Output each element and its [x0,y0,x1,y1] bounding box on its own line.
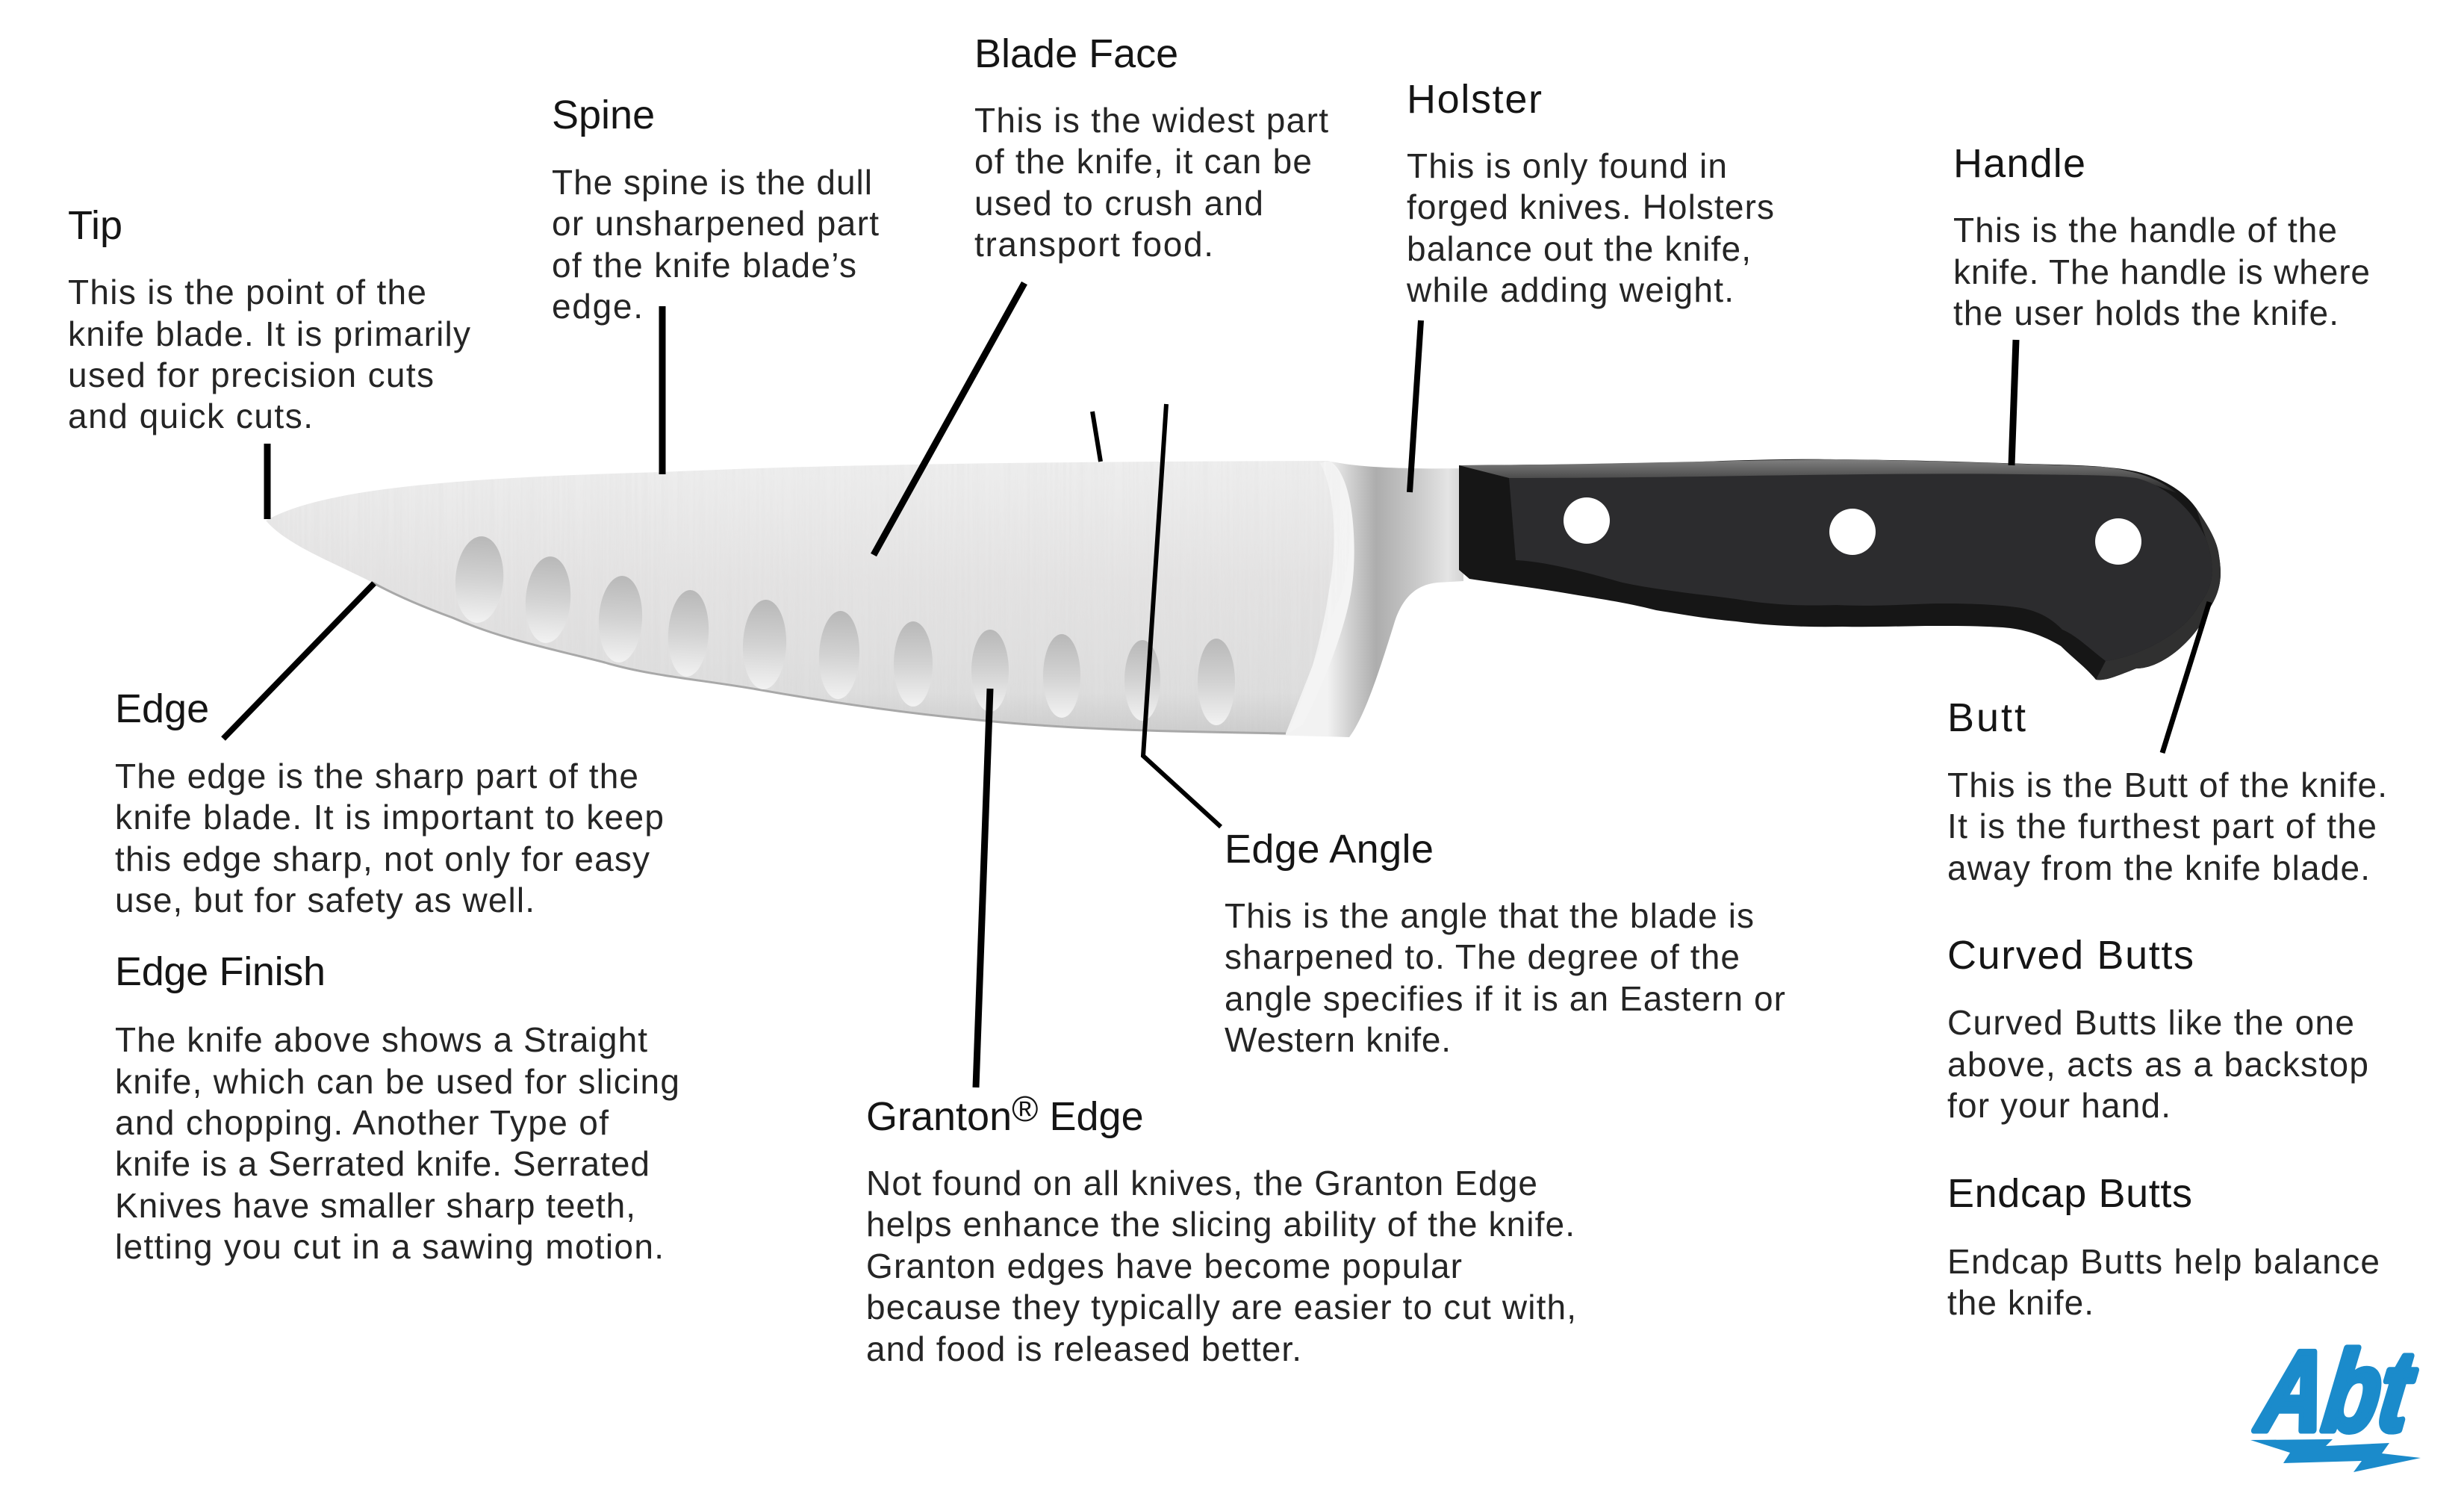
text block: edge finish: The knife above shows a Straight [115,1020,647,1059]
text block: edge: this edge sharp, not only for easy [115,839,650,878]
text block: endcap butts: Endcap Butts help balance [1947,1242,2380,1281]
text block: granton edge: Granton edges have become popular [866,1247,1462,1285]
text block: butt: It is the furthest part of the [1947,807,2377,845]
text block: holster: Holster [1407,77,1542,122]
text block: granton edge: helps enhance the slicing ability of the knife. [866,1205,1575,1244]
text block: edge: knife blade. It is important to keep [115,798,664,837]
text block: granton edge: and food is released better. [866,1329,1301,1368]
text block: granton edge: Granton [866,1094,1012,1139]
logo lightning bolt [2250,1439,2421,1472]
text block: holster: This is only found in [1407,146,1727,185]
text block: blade face [974,31,1328,264]
text block: edge angle: This is the angle that the blade is [1225,896,1754,935]
logo wordmark: Abt [2250,1329,2423,1455]
leader line: spine short mark [1092,412,1101,462]
text block: curved butts: above, acts as a backstop [1947,1045,2368,1084]
text block: holster [1406,77,1774,309]
blade [266,461,1350,733]
text block: edge finish: knife is a Serrated knife. Serrated [115,1144,650,1183]
leader line: blade face [874,283,1024,555]
text block: granton edge: Edge [1038,1094,1144,1139]
text block: edge finish: knife, which can be used for slicing [115,1062,679,1101]
text block: handle: knife. The handle is where [1953,252,2370,291]
text block: endcap butts [1947,1171,2380,1322]
text block: butt: away from the knife blade. [1947,848,2370,887]
text block: edge angle: Western knife. [1225,1020,1451,1059]
leader line: edge angle [1143,404,1221,827]
text block: blade face: of the knife, it can be [974,142,1312,181]
text block: granton edge [866,1090,1576,1368]
text block: holster: while adding weight. [1406,270,1734,309]
text block: edge angle: angle specifies if it is an Eastern or [1225,979,1785,1018]
leader line: granton edge [976,689,990,1087]
text block: butt: This is the Butt of the knife. [1947,766,2387,804]
leader line: tip [264,444,270,519]
text block: holster: balance out the knife, [1407,229,1751,268]
handle [1459,459,2221,680]
text block: curved butts [1947,933,2368,1125]
text block: edge finish [115,949,679,1266]
text block: handle: Handle [1953,141,2085,186]
text block: edge finish: and chopping. Another Type of [115,1103,609,1142]
text block: spine: The spine is the dull [552,163,872,202]
text block: holster: forged knives. Holsters [1407,187,1774,226]
text block: edge: The edge is the sharp part of the [115,757,638,795]
text block: edge angle: Edge Angle [1225,827,1434,872]
leader line: edge [223,583,374,739]
text block: granton edge: Not found on all knives, the Granton Edge [866,1164,1537,1202]
text block: curved butts: Curved Butts [1947,933,2194,978]
text block: spine: of the knife blade’s [552,246,856,285]
text block: edge: use, but for safety as well. [115,881,535,919]
heel highlight [1288,461,1354,733]
leader line: holster [1410,320,1421,492]
text block: granton edge: ® [1012,1090,1038,1129]
rivets [1564,497,2141,565]
text block: tip [68,203,470,435]
text block: tip: used for precision cuts [68,356,434,394]
text block: granton edge: because they typically are easier to cut with, [866,1288,1576,1326]
text block: edge finish: Knives have smaller sharp teeth, [115,1186,635,1225]
text block: endcap butts: the knife. [1947,1283,2094,1322]
text block: edge angle: sharpened to. The degree of the [1225,937,1740,976]
text block: butt: Butt [1947,695,2026,740]
text block: spine [552,93,879,326]
text block: edge finish: Edge Finish [115,949,326,994]
text block: spine: or unsharpened part [552,204,879,243]
text block: edge [115,686,664,919]
granton dimples [452,535,1235,725]
text block: endcap butts: Endcap Butts [1947,1171,2192,1216]
text block: edge: Edge [115,686,209,731]
text block: blade face: This is the widest part [974,101,1328,140]
text block: tip: This is the point of the [68,273,426,311]
logo: Abt [2250,1329,2423,1472]
bolster [1269,461,1463,737]
text block: handle: the user holds the knife. [1953,294,2339,332]
leader line: handle [2012,340,2016,465]
leader line: butt [2162,602,2209,753]
text block: handle [1953,141,2370,332]
brushed texture [261,456,1359,739]
text block: tip: and quick cuts. [68,397,313,435]
text block: handle: This is the handle of the [1953,211,2337,249]
text block: spine: Spine [552,93,655,137]
text block: blade face: used to crush and [974,184,1263,223]
knife illustration [261,456,2221,739]
leader line: spine [659,306,666,474]
text block: tip: Tip [68,203,122,248]
text block: blade face: Blade Face [974,31,1178,76]
text block: spine: edge. [552,287,643,326]
text block: edge finish: letting you cut in a sawing motion. [115,1227,664,1266]
text block: tip: knife blade. It is primarily [68,314,470,353]
text block: blade face: transport food. [974,225,1213,264]
blade lower edge shading [373,583,1286,733]
text block: butt [1947,695,2387,887]
text block: edge angle [1225,827,1785,1059]
text block: curved butts: Curved Butts like the one [1947,1003,2354,1042]
text block: curved butts: for your hand. [1947,1086,2171,1125]
